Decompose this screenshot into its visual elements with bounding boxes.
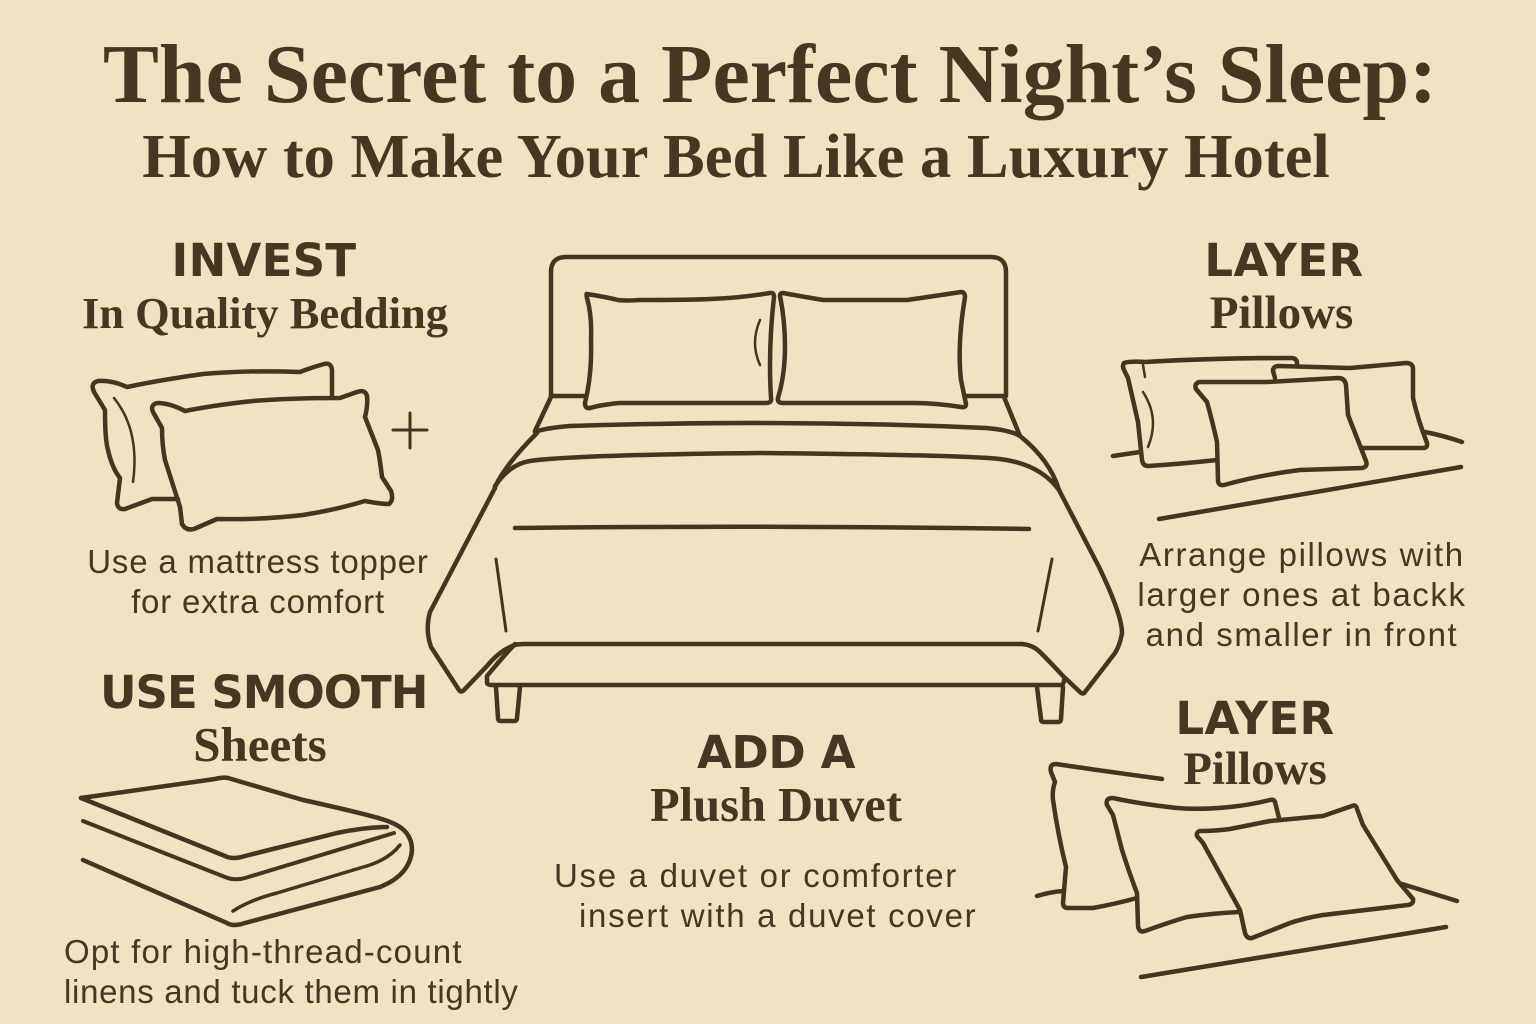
text: high thread count [64,933,519,1010]
subheading: pillows: Pillows [1183,743,1327,795]
heading: invest: INVEST [172,234,356,287]
heading: layer: LAYER [1175,692,1335,745]
text: mattress topper [87,543,429,620]
text: arrange pillows: Arrange pillows with [1139,536,1465,573]
subtitle: How to Make Your Bed Like a Luxury Hotel [142,121,1330,191]
icon: folded sheets [81,778,412,925]
text: arrange pillows [1137,536,1467,653]
subheading: in quality bedding: In Quality Bedding [82,288,448,338]
subheading: plush duvet: Plush Duvet [650,779,902,832]
heading: add a: ADD A [697,726,855,779]
heading: layer: LAYER [1204,234,1364,287]
subheading: sheets: Sheets [193,717,327,772]
panel: invest in quality bedding [82,234,448,620]
panel: layer pillows bottom heading [1175,692,1335,795]
panel: use smooth sheets [64,666,519,1010]
text: mattress topper: for extra comfort [131,583,385,620]
text: high thread count: linens and tuck them in tightly [64,973,519,1010]
text: duvet insert [554,857,977,934]
text: duvet insert: insert with a duvet cover [579,897,977,934]
text: duvet insert: Use a duvet or comforter [554,857,958,894]
icon: central bed [428,257,1122,722]
icon: layered pillows [1113,358,1462,519]
text: high thread count: Opt for high-thread-count [64,933,463,970]
text: mattress topper: Use a mattress topper [87,543,429,580]
subheading: pillows: Pillows [1210,287,1353,339]
text: arrange pillows: and smaller in front [1146,616,1458,653]
heading: use smooth: USE SMOOTH [100,666,427,719]
panel: add a plush duvet [554,726,977,934]
title: The Secret to a Perfect Night’s Sleep: [103,28,1437,121]
icon: three pillows bottom right [1037,764,1457,977]
panel: layer pillows top [1137,234,1467,653]
text: arrange pillows: larger ones at backk [1137,576,1467,613]
icon: pillows with plus [93,364,427,529]
